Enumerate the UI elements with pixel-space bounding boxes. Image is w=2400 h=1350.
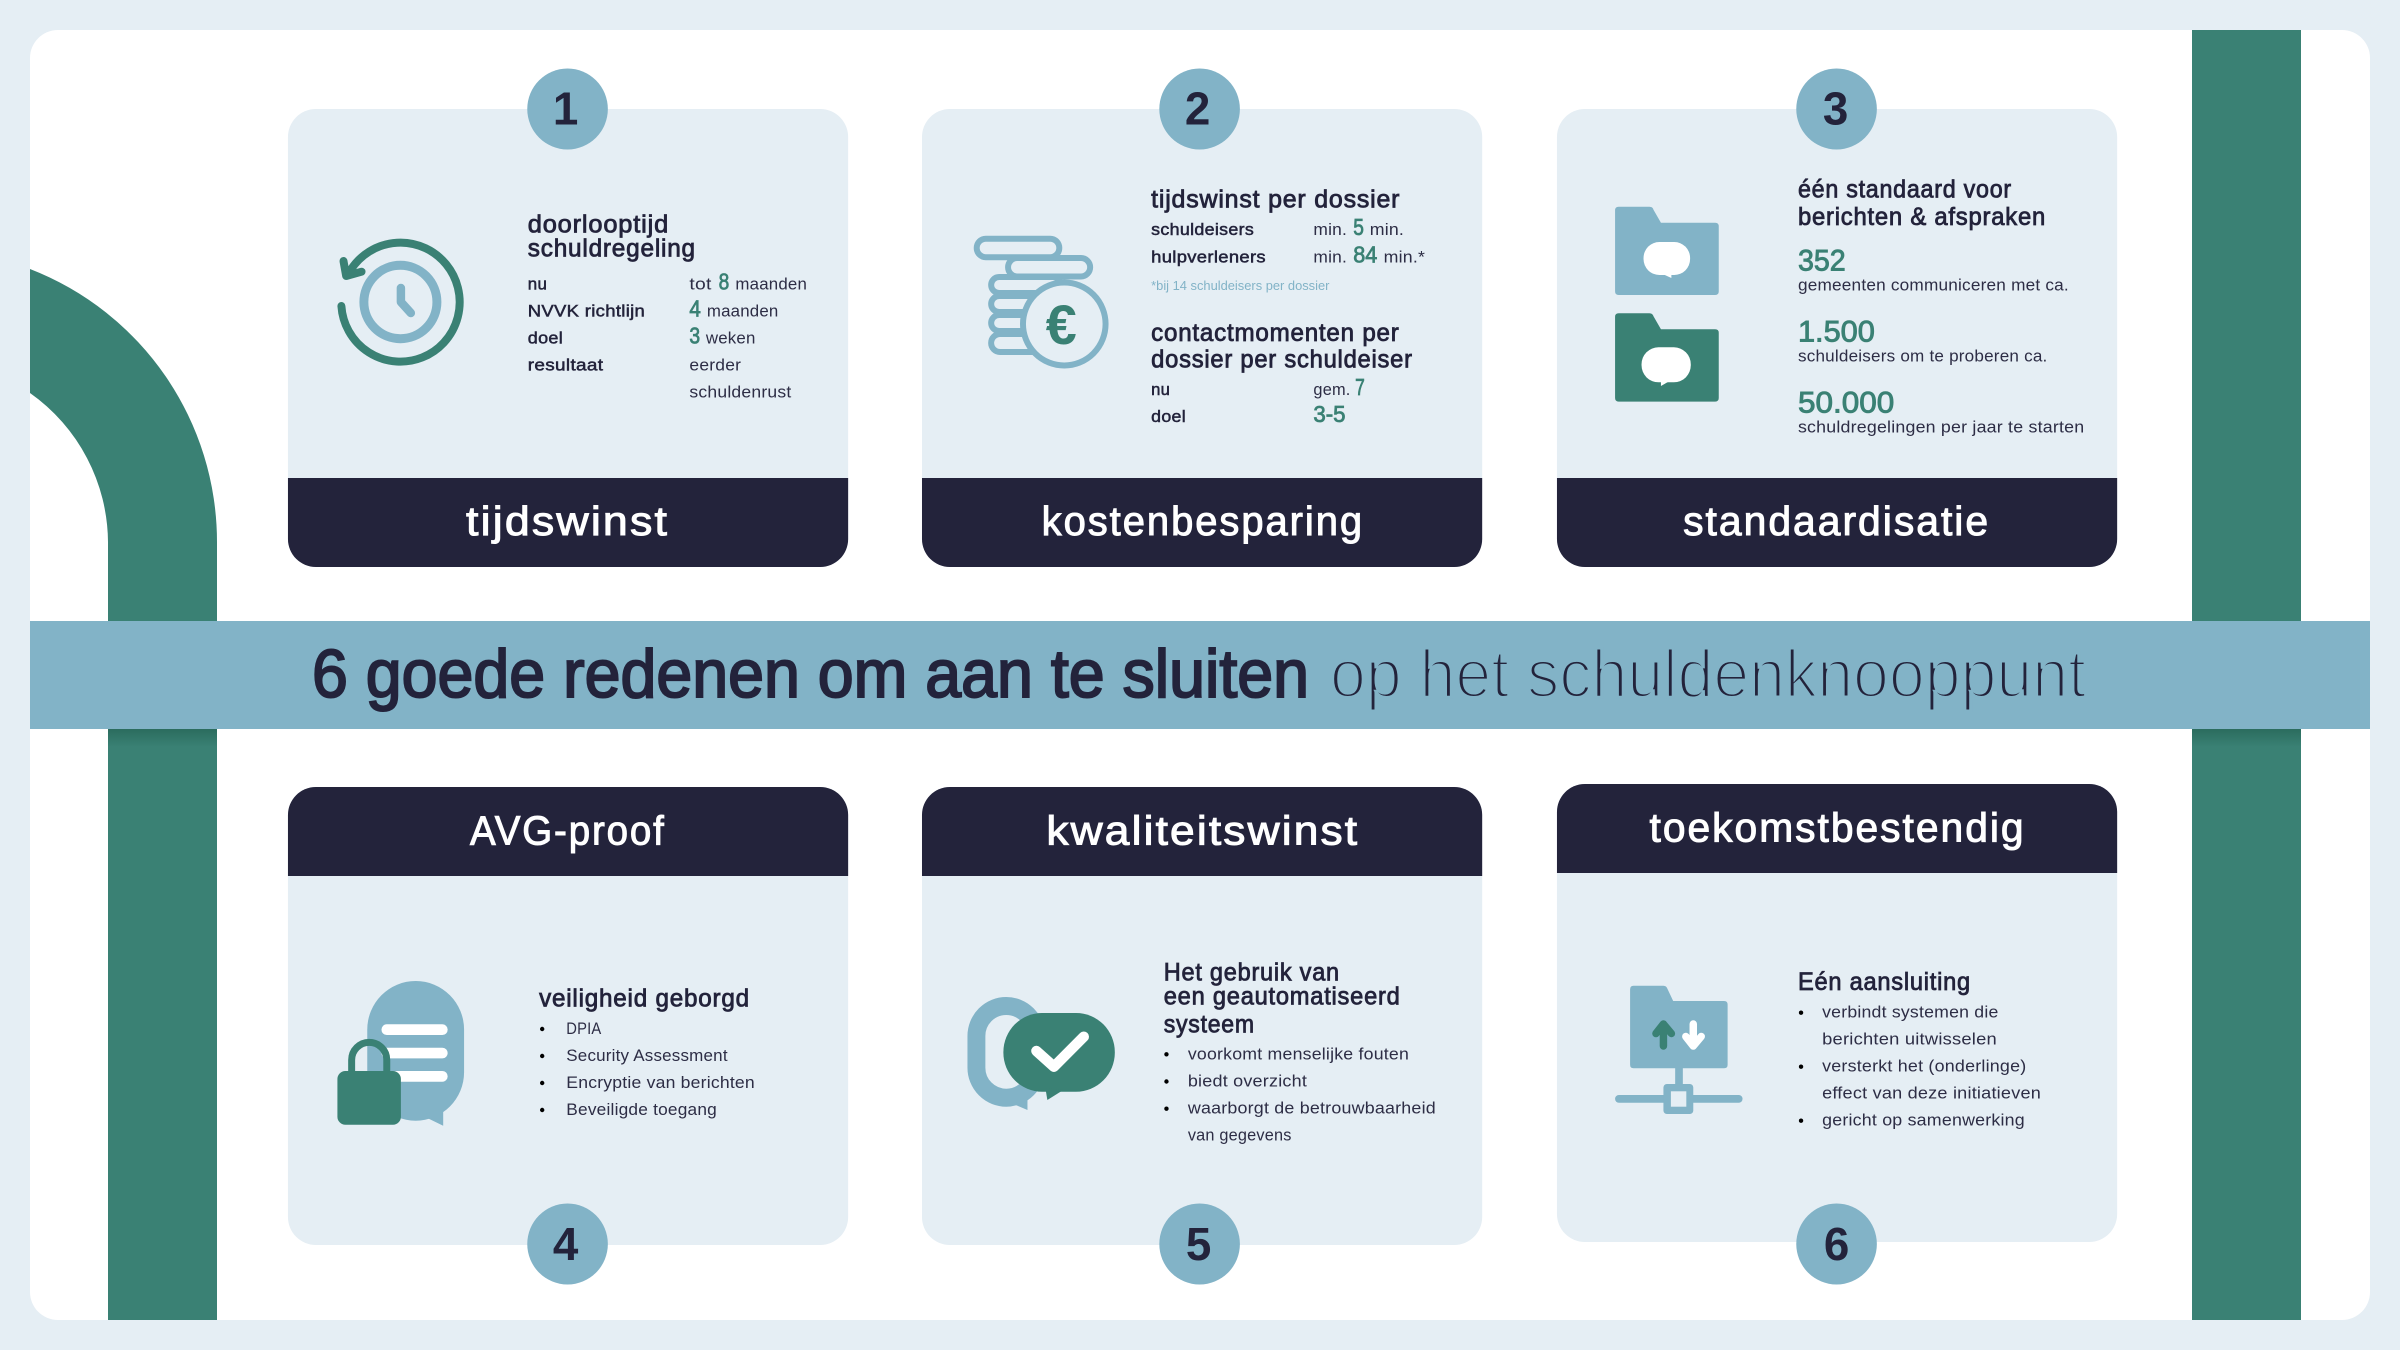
footer label: standaardisatie [1683, 498, 1990, 544]
panel 2: kostenbesparing [922, 68, 1482, 567]
row values: weken [705, 328, 756, 348]
row values: tot [689, 274, 712, 293]
row values: 4 [689, 295, 701, 322]
time savings table: 84 [1353, 241, 1378, 267]
row labels: nu [528, 274, 547, 293]
number badge 5: 5 [1186, 1218, 1211, 1270]
contact moments table: gem. [1313, 380, 1351, 399]
heading: Het gebruik van een geautomatiseerd systeem: systeem [1164, 1010, 1255, 1038]
number badge 2: 2 [1185, 82, 1210, 135]
bullet list: verbindt systemen die [1822, 1002, 1999, 1021]
header bar: kwaliteitswinst [922, 787, 1482, 876]
bullet list: gericht op samenwerking [1822, 1111, 2025, 1130]
bullet list [1164, 1044, 1436, 1144]
number badge 1: 1 [553, 82, 578, 135]
contact moments table [1151, 374, 1365, 427]
time savings table: min. [1313, 247, 1347, 266]
stat: 352 [1798, 245, 2069, 295]
time savings table: min. [1370, 220, 1404, 239]
time savings table: schuldeisers [1151, 220, 1254, 239]
number badge 2 [1159, 68, 1240, 150]
icon: padlock and speech bubble [337, 981, 464, 1126]
stat: 352: gemeenten communiceren met ca. [1798, 276, 2069, 295]
icon: coin stack with euro: € [1046, 293, 1077, 356]
contact moments table: 7 [1355, 374, 1365, 400]
footer bar: kostenbesparing [922, 478, 1482, 567]
footer bar: standaardisatie [1557, 478, 2117, 567]
heading: veiligheid geborgd: veiligheid geborgd [539, 985, 750, 1013]
stat: 50.000: 50.000 [1798, 386, 1894, 419]
time savings table: min.* [1384, 247, 1425, 266]
header label: kwaliteitswinst [1046, 807, 1359, 853]
icon: clock with return arrow [341, 243, 460, 362]
time savings table: hulpverleners [1151, 247, 1266, 266]
stat: 1.500: 1.500 [1798, 316, 1875, 349]
heading: doorlooptijd schuldregeling: schuldregeling [528, 235, 696, 263]
time savings table [1151, 214, 1425, 267]
heading: tijdswinst per dossier: tijdswinst per dossier [1151, 186, 1400, 214]
bullet list: voorkomt menselijke fouten [1188, 1044, 1409, 1063]
row labels: resultaat [528, 356, 603, 375]
contact moments table: nu [1151, 380, 1170, 399]
number badge 6 [1796, 1204, 1877, 1284]
title band [30, 621, 2370, 729]
footer bar: tijdswinst [288, 478, 848, 567]
contact moments table: doel [1151, 407, 1186, 426]
icon: blue folder with speech bubble [1615, 207, 1719, 295]
number badge 5 [1159, 1204, 1240, 1284]
row values: maanden [735, 274, 807, 293]
icon: green folder with speech bubble [1615, 313, 1719, 402]
right green strip [2192, 30, 2301, 1320]
bullet list [540, 1019, 755, 1119]
number badge 4 [527, 1204, 608, 1284]
contact moments table: 3-5 [1313, 401, 1346, 427]
heading: één standaard: berichten & afspraken [1798, 203, 2046, 231]
left green arc and strip [30, 269, 217, 1320]
heading: Het gebruik van een geautomatiseerd systeem [1164, 959, 1401, 1038]
heading: doorlooptijd schuldregeling [528, 211, 696, 263]
bullet list [1799, 1002, 2041, 1130]
icon: coin stack with euro [977, 239, 1106, 366]
bullet list: waarborgt de betrouwbaarheid [1187, 1098, 1436, 1117]
bullet list: Security Assessment [566, 1046, 728, 1065]
row values: maanden [707, 301, 778, 321]
time savings table: 5 [1353, 214, 1364, 240]
stat: 1.500: schuldeisers om te proberen ca. [1798, 347, 2047, 366]
header label: toekomstbestendig [1650, 805, 2026, 851]
panel 5: kwaliteitswinst [922, 787, 1482, 1284]
row values: schuldenrust [689, 383, 792, 402]
bullet list: versterkt het (onderlinge) [1822, 1057, 2026, 1076]
row values [689, 268, 807, 402]
bullet list: Beveiligde toegang [566, 1100, 717, 1119]
title: bold part: 6 goede redenen om aan te sluiten [312, 636, 1309, 712]
header bar: AVG-proof [288, 787, 848, 876]
number badge 3: 3 [1823, 82, 1848, 135]
panel 6: toekomstbestendig [1557, 784, 2117, 1284]
stat: 50.000: schuldregelingen per jaar te starten [1798, 417, 2084, 436]
heading: contactmomenten [1151, 319, 1413, 374]
heading: Het gebruik van een geautomatiseerd systeem: een geautomatiseerd [1164, 983, 1401, 1011]
heading: één standaard: één standaard voor [1798, 176, 2012, 204]
row labels: NVVK richtlijn [528, 301, 645, 321]
bullet list: berichten uitwisselen [1822, 1029, 1997, 1048]
time savings table: min. [1313, 220, 1347, 239]
panel 4: AVG-proof [288, 787, 848, 1284]
heading: Het gebruik van een geautomatiseerd systeem: Het gebruik van [1164, 959, 1340, 987]
number badge 1 [527, 68, 608, 150]
icon: speech bubbles with check mark [976, 1006, 1115, 1110]
row values: eerder [689, 356, 741, 375]
number badge 6: 6 [1824, 1218, 1849, 1270]
stat: 352: 352 [1798, 245, 1846, 278]
bullet list: effect van deze initiatieven [1822, 1084, 2041, 1103]
heading: één standaard [1798, 176, 2046, 231]
heading: contactmomenten: dossier per schuldeiser [1151, 346, 1413, 374]
heading: doorlooptijd schuldregeling: doorlooptijd [528, 211, 669, 239]
row labels: doel [528, 328, 563, 348]
row values: 3 [689, 322, 700, 349]
bullet list: DPIA [566, 1019, 602, 1038]
heading: contactmomenten: contactmomenten per [1151, 319, 1400, 347]
bullet list: Encryptie van berichten [566, 1073, 755, 1092]
icon: network folder with arrows [1615, 986, 1743, 1114]
footer label: tijdswinst [466, 498, 669, 544]
header label: AVG-proof [470, 807, 666, 853]
panel 3: standaardisatie [1557, 68, 2117, 567]
footer label: kostenbesparing [1042, 498, 1364, 544]
number badge 4: 4 [553, 1218, 579, 1270]
bullet list: biedt overzicht [1188, 1071, 1307, 1090]
title: light part: op het schuldenknooppunt [1330, 636, 2086, 712]
footnote: *bij 14 schuldeisers per dossier [1151, 279, 1329, 293]
heading: Eén aansluiting: Eén aansluiting [1798, 968, 1971, 996]
panel 1: tijdswinst [288, 68, 848, 567]
row values: 8 [719, 268, 729, 294]
row labels [528, 274, 645, 375]
bullet list: van gegevens [1188, 1125, 1292, 1144]
stat: 1.500 [1798, 316, 2047, 366]
stat: 50.000 [1798, 386, 2084, 436]
number badge 3 [1796, 68, 1877, 150]
header bar: toekomstbestendig [1557, 784, 2117, 873]
